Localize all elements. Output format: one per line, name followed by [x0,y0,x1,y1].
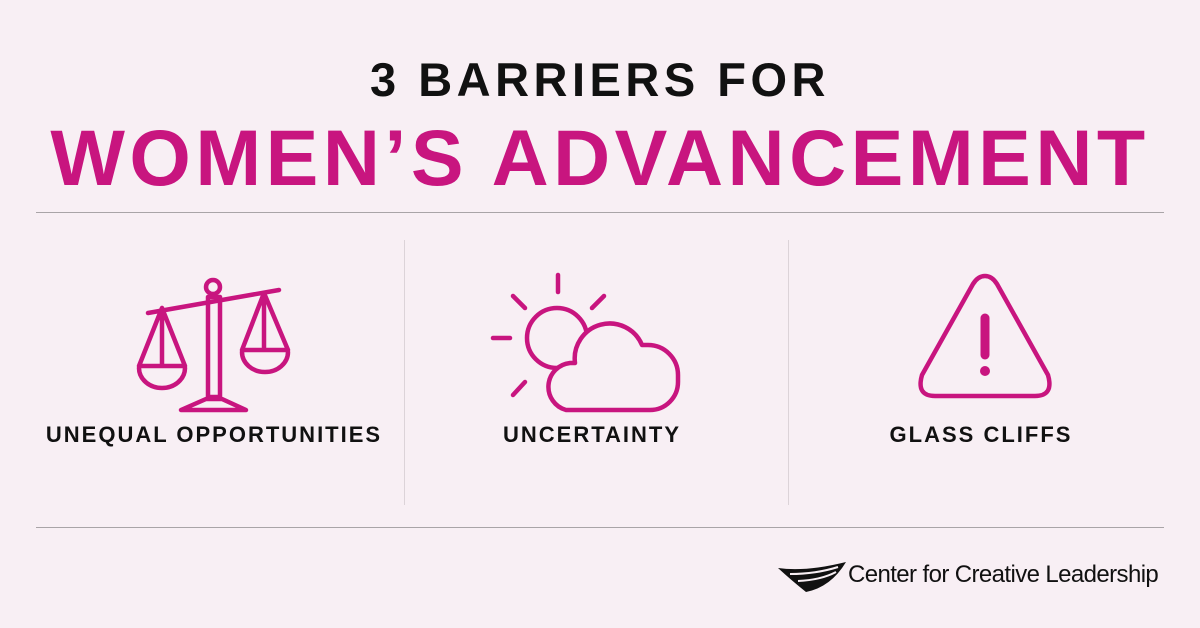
label: uncertainty: UNCERTAINTY [503,422,681,447]
icon: scales [139,280,288,410]
title line 1: 3 BARRIERS FOR [370,53,830,106]
icon: logo mark [778,562,846,592]
icon: sun and cloud [493,275,678,410]
logo [778,561,1158,592]
icon: warning triangle [921,276,1049,396]
logo text: Center for Creative Leadership [848,561,1158,588]
label: glass cliffs: GLASS CLIFFS [890,422,1072,447]
title line 2: WOMEN’S ADVANCEMENT [50,113,1150,202]
label: unequal opportunities: UNEQUAL OPPORTUNITIES [46,422,382,447]
